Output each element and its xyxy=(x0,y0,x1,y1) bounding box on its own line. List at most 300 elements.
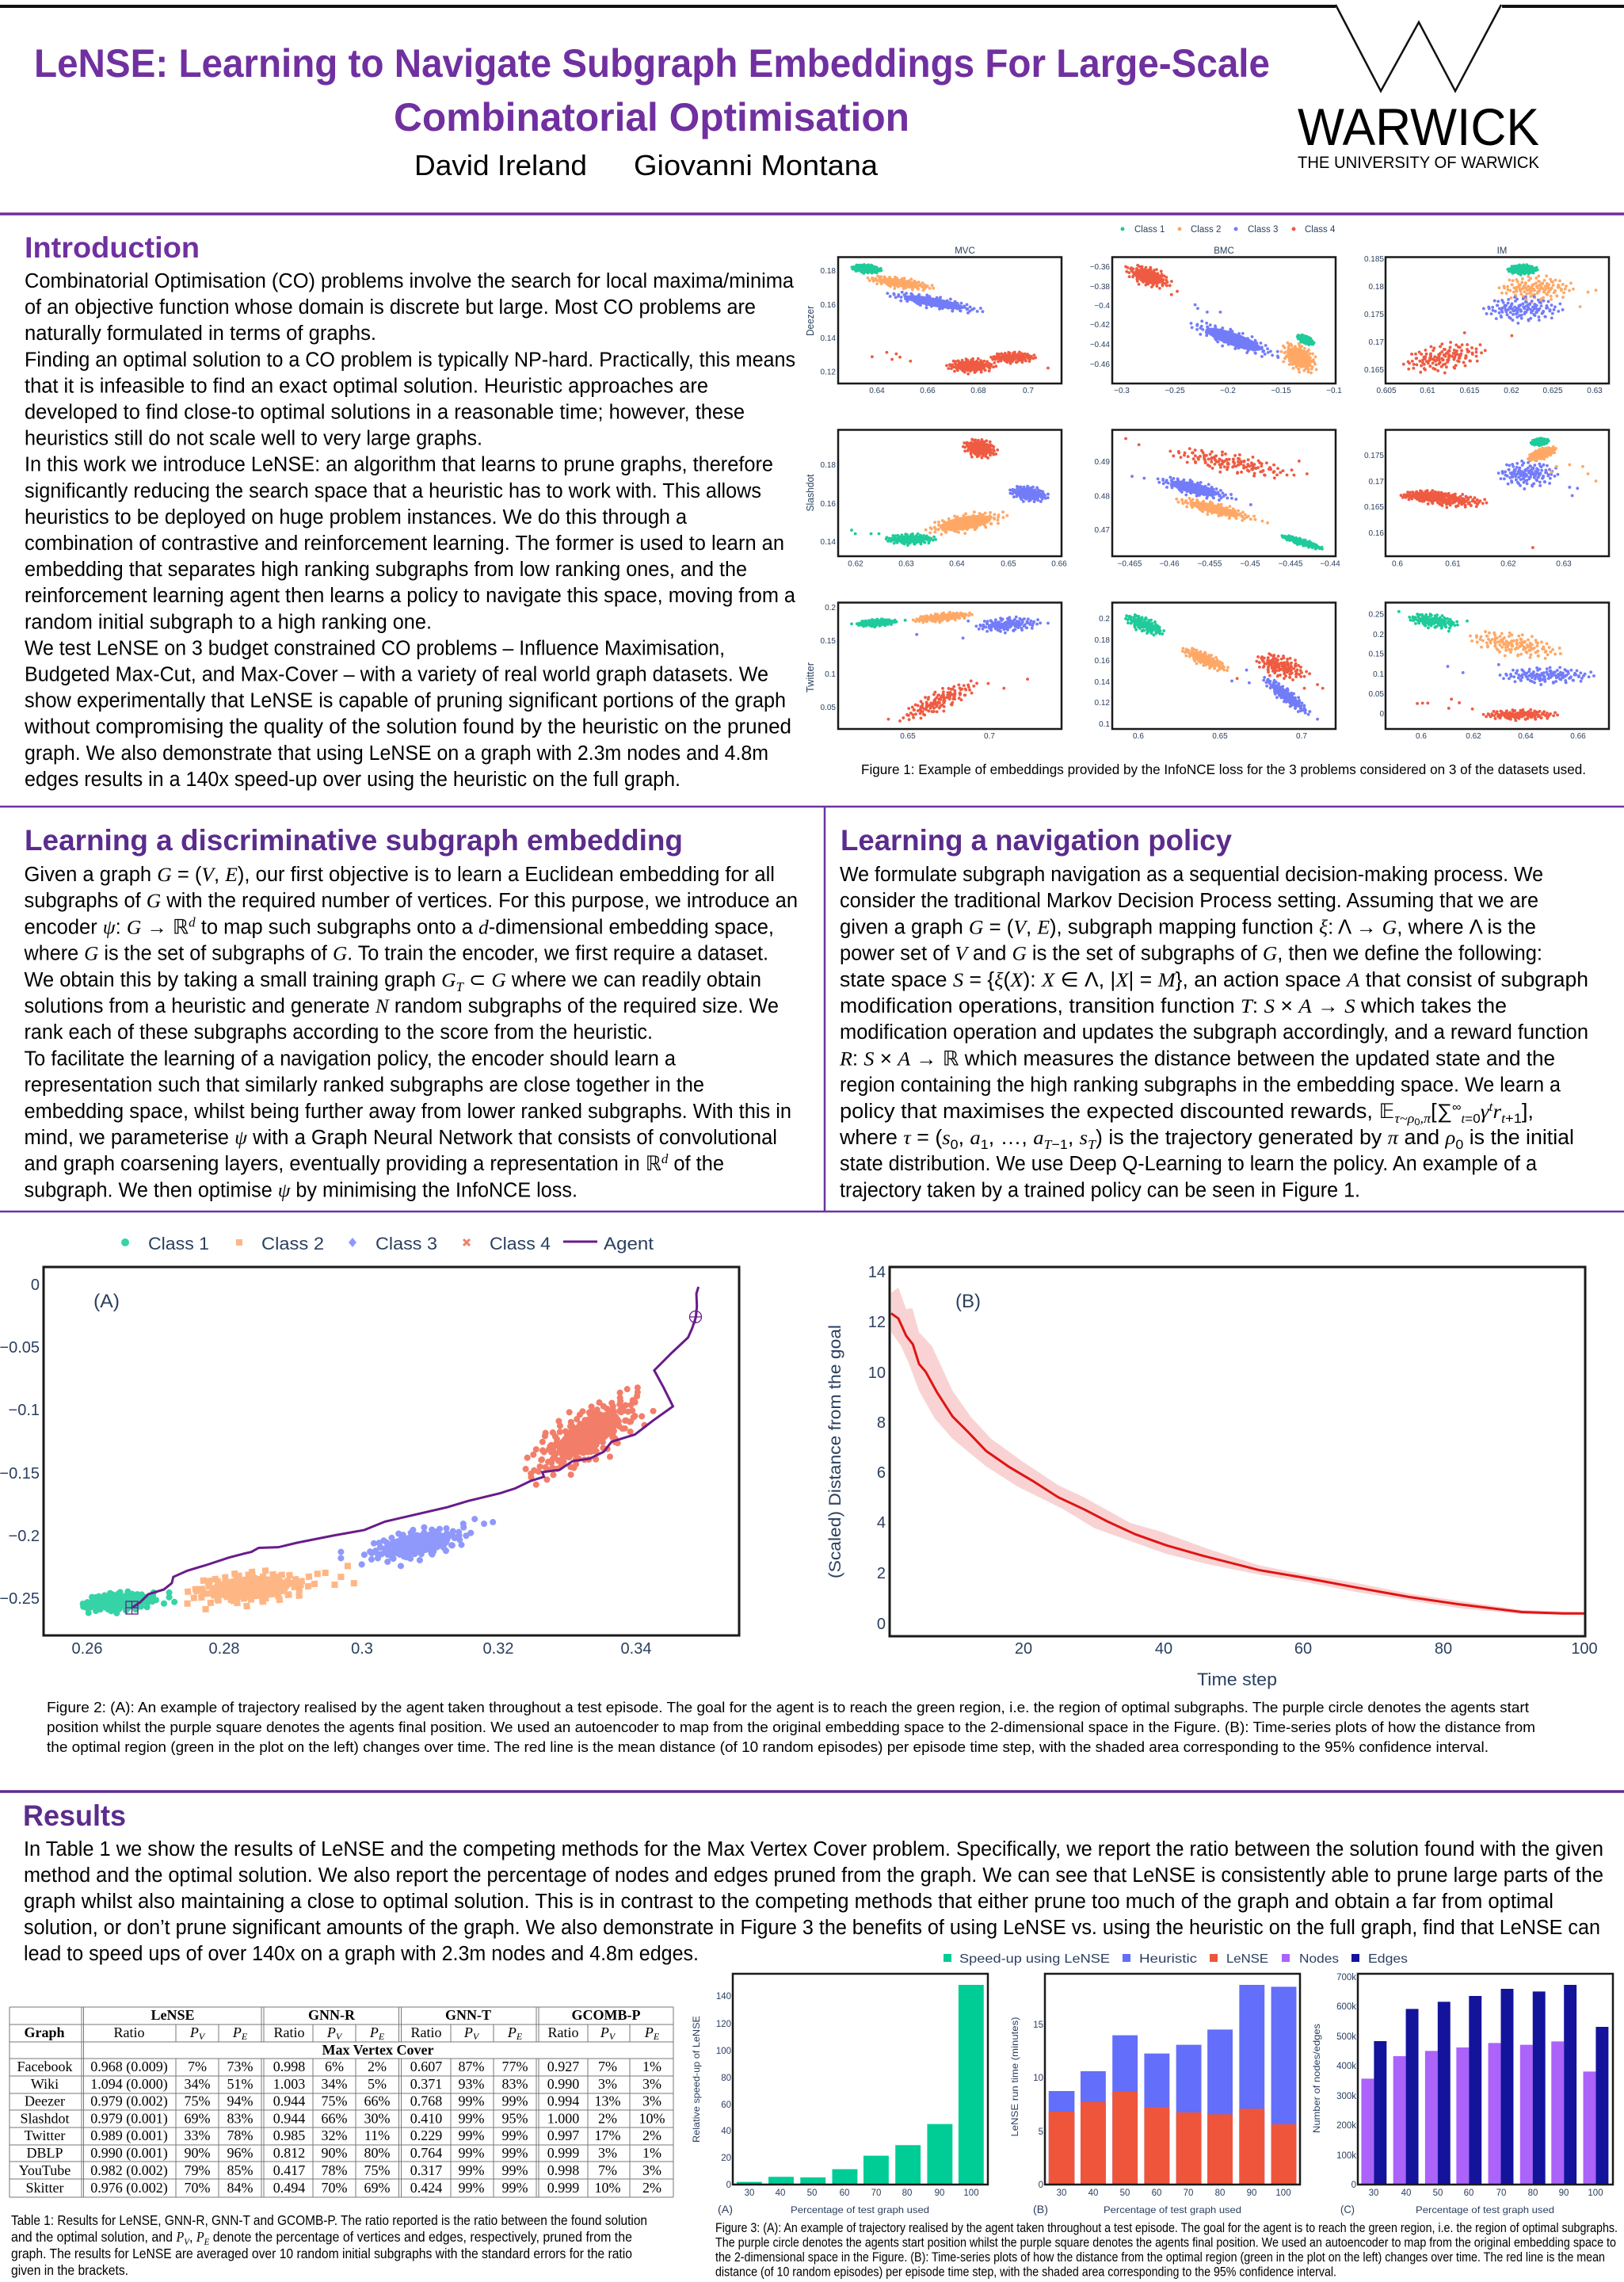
text block: mind, we parameterise ψ with a Graph Neural Network that consists of convolutional xyxy=(24,1126,777,1149)
table rows: 90% xyxy=(322,2145,347,2161)
text block: consider the traditional Markov Decision Process setting. Assuming that we are xyxy=(840,890,1538,912)
text block: introduction body: heuristics to be deployed on huge problem instances. We do this through a xyxy=(25,506,688,529)
text block: r xyxy=(1493,1100,1501,1123)
table rows: 0.768 xyxy=(410,2093,442,2109)
title xyxy=(34,41,1270,139)
table rows: 0.968 (0.009) xyxy=(90,2059,168,2075)
x axis title xyxy=(1340,2203,1554,2215)
text block: method and the optimal solution. We also report the percentage of nodes and edges pruned from the graph. We can see that LeNSE is consistently able to prune large parts of the xyxy=(24,1864,1603,1887)
table rows: 0.999 xyxy=(547,2180,579,2196)
table column headers: P xyxy=(369,2024,379,2040)
text block: , xyxy=(959,1127,970,1149)
y axis tick labels: 0.16 xyxy=(1095,657,1110,666)
table column headers: P xyxy=(232,2024,242,2040)
caption: table 1: V xyxy=(184,2236,190,2247)
y axis labels: 0 xyxy=(877,1616,886,1633)
y axis tick labels: 0.185 xyxy=(1364,255,1384,264)
tick labels: 70 xyxy=(871,2189,881,2198)
table rows: 66% xyxy=(322,2111,347,2127)
y axis labels: 10 xyxy=(868,1364,886,1382)
table rows: 0.998 xyxy=(547,2162,579,2178)
caption: table 1: and the optimal solution, and P xyxy=(11,2229,189,2245)
caption: figure 1: Figure 1: Example of embeddings provided by the InfoNCE loss for the 3 problems considered on 3 of the datasets used. xyxy=(861,761,1586,777)
table rows: Slashdot xyxy=(20,2111,70,2127)
figure 2: panel B distance over time xyxy=(826,1264,1598,1689)
y axis tick labels: 0.17 xyxy=(1369,478,1384,487)
tick labels: 90 xyxy=(1559,2189,1569,2198)
table rows: 3% xyxy=(642,2162,661,2178)
table rows: Facebook xyxy=(17,2059,72,2074)
text block: trajectory taken by a trained policy can be seen in Figure 1. xyxy=(840,1179,1360,1201)
y axis tick labels: 0.49 xyxy=(1095,458,1110,467)
logo: University of Warwick: THE UNIVERSITY OF WARWICK xyxy=(1298,154,1539,172)
text block: subgraph. We then optimise ψ by minimising the InfoNCE loss. xyxy=(24,1178,578,1201)
text block: We obtain this by taking a small training graph G xyxy=(24,968,456,991)
text block: introduction body: In this work we introduce LeNSE: an algorithm that learns to prune graphs, therefore xyxy=(25,454,773,476)
x axis tick labels: 0.7 xyxy=(1023,387,1034,395)
text block: 0 xyxy=(951,1137,959,1152)
tick labels: 500k xyxy=(1336,2032,1356,2042)
table rows: 93% xyxy=(458,2076,485,2092)
figure 3: legend: Nodes xyxy=(1299,1952,1339,1966)
table rows: 78% xyxy=(322,2162,347,2178)
text block: lead to speed ups of over 140x on a graph with 2.3m nodes and 4.8m edges. xyxy=(24,1943,699,1965)
text block: =0 xyxy=(1465,1112,1481,1126)
panel tag B: (B) xyxy=(955,1291,981,1312)
table rows: 1.094 (0.000) xyxy=(90,2076,168,2093)
y axis tick labels: −0.36 xyxy=(1090,263,1110,272)
tick labels: 0 xyxy=(1039,2181,1043,2190)
text block: introduction body: combination of contrastive and reinforcement learning. The former is used to learn an xyxy=(25,532,784,555)
caption: figure 2 xyxy=(47,1699,1535,1755)
row titles: Twitter xyxy=(804,662,816,693)
caption: table 1: P xyxy=(196,2229,204,2245)
plot frame xyxy=(44,1267,739,1635)
table rows: 7% xyxy=(598,2059,617,2074)
text block: solution, or don’t prune significant amounts of the graph. We also demonstrate in Figure 3 the benefits of using LeNSE vs. using the heuristic on the full graph, find that LeNSE can xyxy=(24,1917,1600,1939)
y axis labels: −0.05 xyxy=(0,1339,40,1357)
table column headers: Ratio xyxy=(114,2024,144,2040)
table rows: 0.812 xyxy=(273,2145,305,2161)
y axis tick labels: 0.48 xyxy=(1095,493,1110,501)
text block xyxy=(24,863,798,1201)
tick labels: 60 xyxy=(721,2101,731,2110)
x axis tick labels: −0.445 xyxy=(1279,559,1303,569)
text block: T xyxy=(1044,1137,1053,1152)
text block: t xyxy=(1489,1099,1494,1114)
text block: s xyxy=(1080,1126,1088,1149)
table column headers: Ratio xyxy=(410,2024,442,2040)
tick labels: 80 xyxy=(721,2074,731,2083)
table rows xyxy=(17,2059,665,2196)
table column headers: P xyxy=(189,2024,199,2040)
x axis tick labels: 0.62 xyxy=(1500,559,1516,569)
table rows: 99% xyxy=(458,2093,485,2109)
text block: introduction body: graph. We also demonstrate that using LeNSE on a graph with 2.3m nodes and 4.8m xyxy=(25,742,768,765)
table rows: 0.764 xyxy=(410,2145,442,2161)
text block: introduction body: We test LeNSE on 3 budget constrained CO problems – Influence Maximisation, xyxy=(25,637,725,659)
table rows: 0.494 xyxy=(273,2180,305,2196)
x axis tick labels: −0.2 xyxy=(1220,387,1236,395)
table rows: 99% xyxy=(502,2127,528,2143)
authors: David Ireland xyxy=(414,149,587,181)
text block: ,π xyxy=(1420,1111,1431,1126)
text block: 1 xyxy=(981,1137,989,1152)
y axis tick labels: 0.18 xyxy=(821,461,836,470)
tick labels xyxy=(1336,1973,1603,2198)
heuristic bars xyxy=(1049,1985,1296,2185)
x axis labels: 40 xyxy=(1155,1640,1172,1658)
caption: figure 2: the optimal region (green in the plot on the left) changes over time. The red line is the mean distance (of 10 random episodes) per episode time step, with the shaded area corresponding to the 95% confidence interval. xyxy=(47,1738,1489,1755)
tick labels: 90 xyxy=(935,2189,944,2198)
table rows: 99% xyxy=(502,2145,528,2161)
text block: modification operation and updates the subgraph accordingly, and a reward function xyxy=(840,1021,1588,1044)
table rows: 1.003 xyxy=(273,2076,305,2092)
heading: Learning a discriminative subgraph embedding xyxy=(25,824,683,857)
table rows: 99% xyxy=(458,2162,485,2178)
text block: region containing the high ranking subgraphs in the embedding space. We learn a xyxy=(840,1074,1561,1097)
text block: π and ρ xyxy=(1388,1126,1455,1149)
table column headers: V xyxy=(609,2031,616,2042)
x axis tick labels: 0.625 xyxy=(1542,387,1563,395)
panel: learning a navigation policy xyxy=(839,824,1588,1201)
title: Combinatorial Optimisation xyxy=(394,95,909,139)
text block: subgraphs of G with the required number of vertices. For this purpose, we introduce an xyxy=(24,889,798,912)
text block: policy that maximises the expected discounted rewards, 𝔼 xyxy=(840,1101,1359,1123)
table column headers: E xyxy=(378,2031,385,2042)
text block: 0 xyxy=(1455,1137,1463,1152)
x axis tick labels: 0.68 xyxy=(970,387,986,395)
x axis tick labels: −0.45 xyxy=(1240,559,1260,569)
heading: Results xyxy=(23,1799,126,1832)
x axis tick labels: 0.6 xyxy=(1133,732,1144,741)
x axis tick labels: 0.6 xyxy=(1392,559,1403,569)
x axis labels: 20 xyxy=(1015,1640,1032,1658)
text block: γ xyxy=(1481,1100,1489,1123)
table rows: 83% xyxy=(502,2076,528,2092)
table rows: 1% xyxy=(642,2145,661,2161)
text block: R: S × A → ℝ which measures the distance between the updated state and the xyxy=(839,1047,1555,1070)
x axis title: Percentage of test graph used xyxy=(791,2204,929,2215)
x axis title: (C) xyxy=(1340,2203,1355,2215)
text block: T xyxy=(1088,1137,1097,1152)
text block: ∞ xyxy=(1452,1101,1462,1114)
text block: a xyxy=(1033,1126,1044,1149)
x axis labels: 0.34 xyxy=(621,1640,651,1658)
text block: introduction body: random initial subgraph to a high ranking one. xyxy=(25,611,432,633)
y axis tick labels: 0.18 xyxy=(821,267,836,276)
tick labels: 80 xyxy=(902,2189,912,2198)
table rows: Twitter xyxy=(25,2127,65,2143)
table rows: 34% xyxy=(322,2076,347,2092)
y axis tick labels: 0.16 xyxy=(821,301,836,310)
caption: table 1: , xyxy=(189,2229,196,2245)
column titles: IM xyxy=(1497,246,1507,256)
x axis tick labels: 0.64 xyxy=(1518,732,1534,741)
table rows: 0.229 xyxy=(410,2127,442,2143)
text block: introduction body: without compromising the quality of the solution found by the heuristic on the pruned xyxy=(24,716,791,738)
tick labels xyxy=(1033,2021,1291,2198)
y axis labels: 6 xyxy=(877,1464,886,1482)
legend: figure 1 classes: Class 3 xyxy=(1248,225,1278,235)
text block: where G is the set of subgraphs of G. To train the encoder, we first require a dataset. xyxy=(24,942,768,965)
text block: introduction body xyxy=(24,270,796,791)
y axis labels: 8 xyxy=(877,1414,886,1432)
x axis tick labels: 0.62 xyxy=(1466,732,1481,741)
y axis tick labels: 0.165 xyxy=(1364,503,1384,512)
x axis tick labels: −0.44 xyxy=(1320,559,1340,569)
text block: +1 xyxy=(1505,1111,1522,1126)
table rows: 84% xyxy=(227,2180,254,2196)
table column headers: V xyxy=(473,2031,480,2042)
tick labels: 15 xyxy=(1033,2021,1043,2030)
table 1: results xyxy=(10,2007,673,2197)
caption: table 1: E xyxy=(204,2236,210,2247)
text block: introduction body: Finding an optimal solution to a CO problem is typically NP-hard. Practically, this means xyxy=(25,349,795,371)
table rows: 2% xyxy=(642,2127,661,2143)
table rows: 90% xyxy=(184,2145,211,2161)
table column headers: P xyxy=(507,2024,517,2040)
tick labels: 600k xyxy=(1336,2002,1356,2012)
text block: −1 xyxy=(1052,1137,1068,1152)
figure 3A: speed-up bar chart xyxy=(691,1974,988,2215)
table rows: Wiki xyxy=(31,2076,59,2092)
table rows: 7% xyxy=(188,2059,207,2074)
heading: Learning a navigation policy xyxy=(841,824,1232,857)
text block: of the xyxy=(668,1153,724,1175)
tick labels: 120 xyxy=(716,2020,731,2029)
text block: , xyxy=(1068,1127,1080,1149)
y axis tick labels: −0.4 xyxy=(1094,302,1110,311)
text block: t xyxy=(1501,1111,1507,1126)
column titles xyxy=(955,246,1507,256)
agent trajectory line xyxy=(133,1287,699,1607)
figure 3B: run time stacked bar chart xyxy=(1009,1974,1300,2215)
table rows: Skitter xyxy=(25,2180,64,2196)
plot frame xyxy=(890,1267,1585,1636)
text block: introduction body: edges results in a 140x speed-up over using the heuristic on the full graph. xyxy=(25,769,680,791)
table rows: 87% xyxy=(458,2059,485,2074)
y axis tick labels: 0.05 xyxy=(1369,690,1384,699)
legend: Class 3 xyxy=(376,1234,437,1254)
y axis tick labels: 0.2 xyxy=(1099,615,1110,624)
caption: table 1: Table 1: Results for LeNSE, GNN-R, GNN-T and GCOMB-P. The ratio reported is the ratio between the found solution xyxy=(11,2212,647,2228)
legend: figure 1 classes xyxy=(1120,225,1336,235)
table rows: 11% xyxy=(364,2127,390,2143)
text block: a xyxy=(970,1126,981,1149)
column titles: BMC xyxy=(1214,246,1234,256)
text block: introduction body: embedding that separates high ranking subgraphs from low ranking ones, and the xyxy=(25,559,747,581)
text block: τ~ρ xyxy=(1394,1111,1414,1126)
table rows: 0.424 xyxy=(410,2180,442,2196)
scatter clouds xyxy=(82,1383,668,1615)
tick labels: 30 xyxy=(745,2189,754,2198)
y axis title: (Scaled) Distance from the goal xyxy=(826,1325,844,1578)
table rows: 51% xyxy=(227,2076,254,2092)
text block xyxy=(24,1838,1603,1965)
text block: In Table 1 we show the results of LeNSE and the competing methods for the Max Vertex Cover problem. Specifically, we report the ratio between the solution found with the given xyxy=(24,1838,1603,1860)
text block: introduction body: that it is infeasible to find an exact optimal solution. Heuristic approaches are xyxy=(25,375,708,397)
tick labels: 80 xyxy=(1215,2189,1225,2198)
text block: introduction body: of an objective function whose domain is discrete but large. Most CO problems are xyxy=(25,296,756,319)
lense bars xyxy=(1049,2092,1296,2185)
y axis tick labels: 0.2 xyxy=(825,604,836,612)
table rows: 99% xyxy=(458,2145,485,2161)
tick labels: 80 xyxy=(1528,2189,1538,2198)
x axis tick labels: −0.46 xyxy=(1159,559,1180,569)
table rows: YouTube xyxy=(19,2162,71,2178)
heading: introduction: Introduction xyxy=(25,231,200,264)
text block: ⊂ xyxy=(463,969,491,991)
y axis tick labels: 0.2 xyxy=(1373,631,1384,639)
y axis tick labels: 0.1 xyxy=(825,670,836,679)
figure 3: legend: Edges xyxy=(1368,1952,1408,1966)
tick labels: 700k xyxy=(1336,1973,1356,1982)
y axis title: LeNSE run time (minutes) xyxy=(1009,2017,1020,2136)
tick labels: 200k xyxy=(1336,2121,1356,2131)
x axis tick labels: 0.65 xyxy=(900,732,916,741)
table rows: 0.998 xyxy=(273,2059,305,2074)
tick labels: 300k xyxy=(1336,2092,1356,2101)
text block: d xyxy=(661,1151,669,1166)
x axis labels: 0.32 xyxy=(483,1640,513,1658)
x axis tick labels: 0.64 xyxy=(869,387,885,395)
tick labels: 50 xyxy=(1120,2189,1130,2198)
table rows: 7% xyxy=(598,2162,617,2178)
table rows: 0.990 xyxy=(547,2076,579,2092)
table column headers: P xyxy=(463,2024,473,2040)
x axis labels: 80 xyxy=(1435,1640,1452,1658)
table column headers: V xyxy=(336,2031,343,2042)
tick labels: 140 xyxy=(716,1992,731,2002)
text block: d-dimensional embedding space, xyxy=(478,915,774,938)
tick labels: 50 xyxy=(807,2189,817,2198)
table rows: 30% xyxy=(364,2111,390,2127)
x axis title: Percentage of test graph used xyxy=(1104,2204,1241,2215)
text block: to map such subgraphs onto a xyxy=(196,916,478,938)
x axis tick labels: 0.63 xyxy=(1556,559,1572,569)
text block: [∑ xyxy=(1431,1101,1452,1123)
x axis tick labels: 0.66 xyxy=(1051,559,1067,569)
tick labels: 100 xyxy=(1588,2189,1603,2198)
legend xyxy=(121,1234,654,1254)
text block: where τ = (s xyxy=(840,1126,950,1149)
table rows: 99% xyxy=(458,2180,485,2196)
text block: introduction body: show experimentally that LeNSE is capable of pruning significant portions of the graph xyxy=(25,690,786,712)
x axis tick labels: 0.61 xyxy=(1420,387,1435,395)
table rows: 0.976 (0.002) xyxy=(90,2180,168,2196)
y axis title: Number of nodes/edges xyxy=(1311,2024,1322,2133)
table column headers: P xyxy=(326,2024,336,2040)
text block: introduction body: naturally formulated in terms of graphs. xyxy=(25,322,376,345)
text block: graph whilst also maintaining a close to optimal solution. This is in contrast to the competing methods that either prune too much of the graph and obtain a far from optimal xyxy=(24,1891,1553,1913)
y axis tick labels: 0.47 xyxy=(1095,526,1110,535)
x axis tick labels: 0.62 xyxy=(1504,387,1519,395)
y axis labels xyxy=(0,1276,40,1608)
table rows: 77% xyxy=(502,2059,528,2074)
authors: Giovanni Montana xyxy=(634,149,879,181)
column titles: MVC xyxy=(955,246,975,256)
table rows: 0.927 xyxy=(547,2059,579,2074)
caption: table 1: graph. The results for LeNSE are averaged over 10 random initial subgraphs with the standard errors for the ratio xyxy=(11,2246,632,2261)
legend: figure 1 classes: Class 1 xyxy=(1134,225,1165,235)
caption: figure 3 xyxy=(715,2221,1618,2279)
table rows: 0.944 xyxy=(273,2111,305,2127)
table rows: 0.997 xyxy=(547,2127,579,2143)
x axis tick labels: 0.615 xyxy=(1459,387,1480,395)
table rows: 10% xyxy=(639,2111,665,2127)
text block: state distribution. We use Deep Q-Learning to learn the policy. An example of a xyxy=(840,1153,1538,1175)
y axis labels: −0.2 xyxy=(9,1528,40,1545)
tick labels: 10 xyxy=(1033,2074,1043,2083)
legend: figure 1 classes: Class 2 xyxy=(1191,225,1221,235)
scatter point clouds xyxy=(851,261,1596,727)
x axis tick labels: 0.66 xyxy=(1570,732,1586,741)
y axis tick labels: −0.42 xyxy=(1090,321,1110,330)
table column headers: Graph xyxy=(24,2024,65,2040)
figure 3C: nodes and edges grouped bar chart xyxy=(1311,1973,1613,2215)
table rows: 70% xyxy=(322,2180,347,2196)
table rows: 75% xyxy=(364,2162,390,2178)
bars xyxy=(737,1985,984,2185)
caption: figure 3: distance (of 10 random episodes) per episode time step, with the shaded area corresponding to the 95% confidence interval. xyxy=(715,2265,1336,2279)
nodes bars xyxy=(1361,2041,1595,2185)
table rows: 99% xyxy=(502,2180,528,2196)
y axis tick labels: 0.175 xyxy=(1364,452,1384,460)
table rows: 3% xyxy=(598,2076,617,2092)
x axis tick labels: 0.65 xyxy=(1001,559,1016,569)
frame xyxy=(1358,1974,1613,2185)
tick labels: 0 xyxy=(726,2181,731,2190)
y axis tick labels: 0.18 xyxy=(1095,636,1110,645)
table rows: 66% xyxy=(364,2093,390,2109)
tick labels: 60 xyxy=(1464,2189,1473,2198)
text block: modification operations, transition function T: S × A → S which takes the xyxy=(840,994,1507,1017)
x axis tick labels: 0.63 xyxy=(898,559,914,569)
x axis tick labels: 0.6 xyxy=(1416,732,1427,741)
text block: embedding space, whilst being further away from lower ranked subgraphs. With this in xyxy=(24,1101,791,1123)
table rows: 80% xyxy=(364,2145,390,2161)
figure 2: panel A agent trajectory scatter xyxy=(0,1234,739,1658)
text block: introduction body: developed to find close-to optimal solutions in a reasonable time; however, these xyxy=(25,401,745,423)
table rows: 2% xyxy=(598,2111,617,2127)
table rows: 2% xyxy=(642,2180,661,2196)
table rows: 0.994 xyxy=(547,2093,579,2109)
row titles: Slashdot xyxy=(804,474,816,512)
table rows: 0.371 xyxy=(410,2076,442,2092)
x axis tick labels: 0.64 xyxy=(949,559,965,569)
panel: learning a discriminative subgraph embedding xyxy=(24,824,798,1201)
y axis tick labels xyxy=(821,255,1384,729)
table rows: DBLP xyxy=(26,2145,63,2161)
y axis labels: 2 xyxy=(877,1565,886,1582)
text block xyxy=(839,864,1588,1201)
text block: state space S = {ξ(X): X ∈ Λ, |X| = M}, an action space A that consist of subgraph xyxy=(840,968,1588,991)
tick labels: 100 xyxy=(716,2047,731,2056)
title: LeNSE: Learning to Navigate Subgraph Embeddings For Large-Scale xyxy=(34,41,1270,86)
table group headers: GNN-R xyxy=(308,2007,356,2023)
x axis tick labels: 0.7 xyxy=(984,732,995,741)
table column headers: V xyxy=(199,2031,206,2042)
table rows: 0.417 xyxy=(273,2162,305,2178)
text block: introduction body: heuristics still do not scale well to very large graphs. xyxy=(25,428,482,450)
y axis labels: −0.25 xyxy=(0,1590,40,1608)
table rows: 0.317 xyxy=(410,2162,442,2178)
x axis tick labels: 0.66 xyxy=(920,387,936,395)
caption: figure 2: position whilst the purple square denotes the agents final position. We used an autoencoder to map from the original embedding space to the 2-dimensional space in the Figure. (B): Time-series plots of how the distance from xyxy=(47,1719,1535,1735)
y axis tick labels: 0.175 xyxy=(1364,311,1384,319)
text block: G where we can readily obtain xyxy=(491,968,762,991)
